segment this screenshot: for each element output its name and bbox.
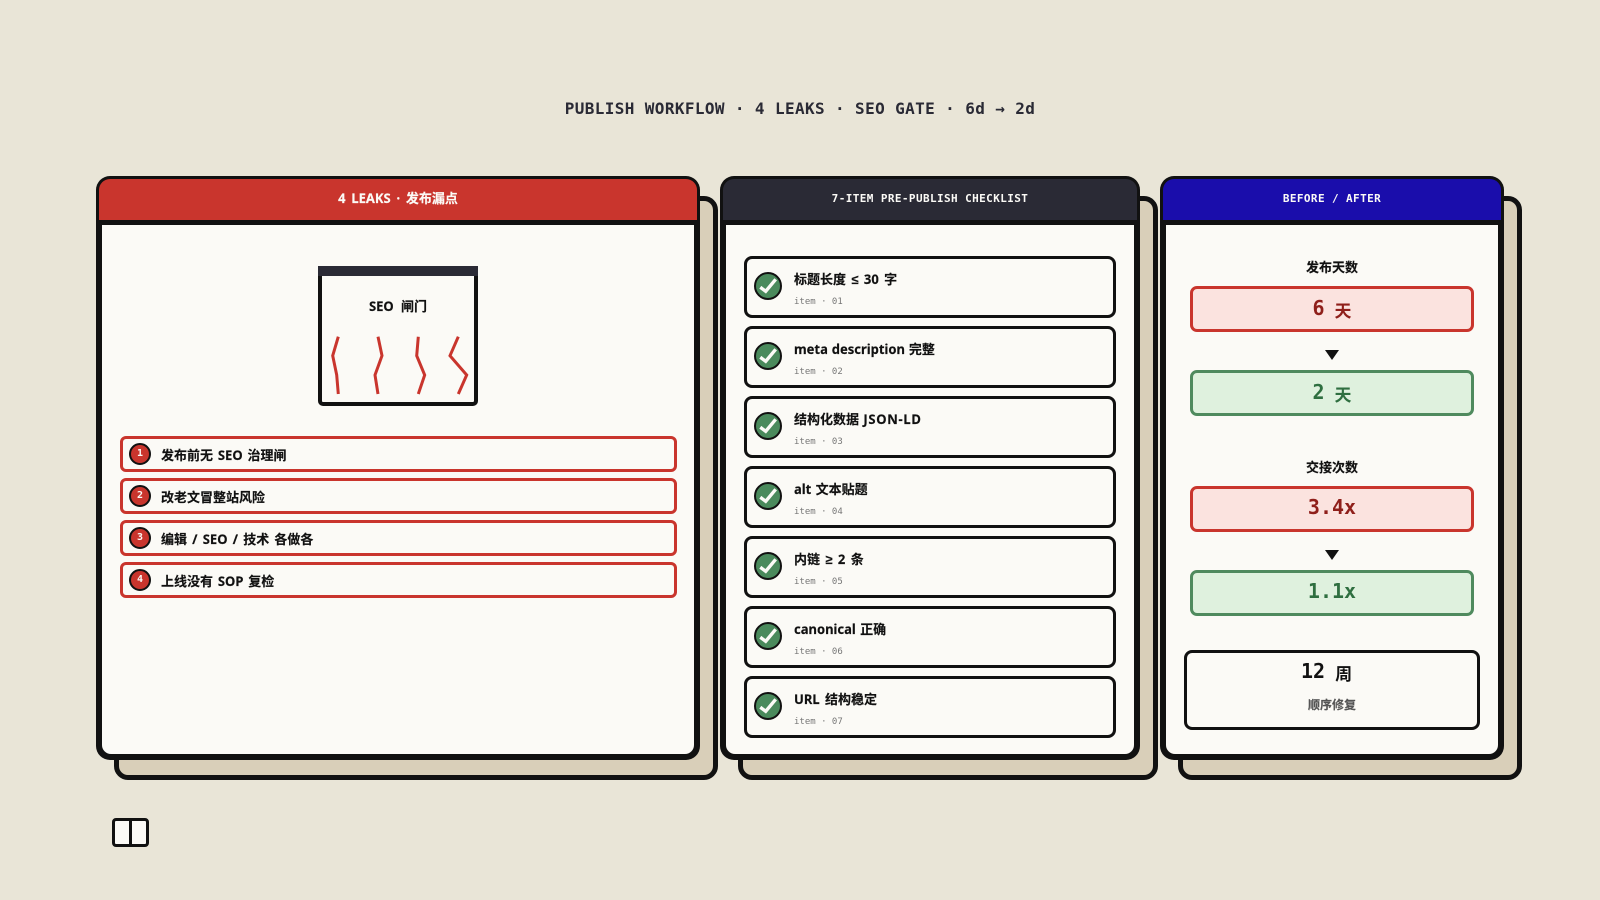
leak number 2: 2 [137, 490, 143, 501]
check item 7 [744, 676, 1116, 738]
arrow down [1325, 350, 1339, 360]
panel: 4 leaks [96, 176, 718, 780]
after value: 1.1x: 1.1x [1308, 579, 1356, 603]
before value: 3.4x: 3.4x [1308, 495, 1356, 519]
summary box: 12 weeks [1184, 650, 1480, 730]
check item 7: item · 07 [794, 717, 843, 727]
check item 5: 内链 ≥ 2 条 [794, 550, 864, 568]
check item 4: item · 04 [794, 507, 843, 517]
summary caption: 顺序修复 [1308, 696, 1356, 713]
panel: checklist [720, 176, 1158, 780]
leak number 3: 3 [137, 532, 143, 543]
after value: 1.1x [1190, 570, 1474, 616]
check item 6 [744, 606, 1116, 668]
after value: 2 days: 2 天 [1312, 380, 1352, 406]
leak text 4: 上线没有 SOP 复检 [161, 572, 274, 590]
leak number 3 [129, 527, 151, 549]
check item 2: item · 02 [794, 367, 843, 377]
panel heading: 4 leaks: 4 LEAKS · 发布漏点 [338, 189, 458, 207]
check item 5 [744, 536, 1116, 598]
panel heading: checklist: 7-ITEM PRE-PUBLISH CHECKLIST [832, 192, 1028, 205]
gate label: SEO 闸门 [369, 297, 427, 315]
arrow down [1325, 550, 1339, 560]
leak row 4 [120, 562, 677, 598]
check item 2 [744, 326, 1116, 388]
check item 6: item · 06 [794, 647, 843, 657]
panel heading: before / after [1163, 179, 1501, 220]
check item 5: item · 05 [794, 577, 843, 587]
icon: SEO gate with cracks [318, 266, 478, 406]
check item 1: 标题长度 ≤ 30 字 [794, 270, 897, 288]
panel heading: 4 leaks [99, 179, 697, 220]
before value: 6 days [1190, 286, 1474, 332]
title: PUBLISH WORKFLOW · 4 LEAKS · SEO GATE · 6d → 2d [565, 99, 1035, 118]
panel: before / after [1160, 176, 1522, 780]
metric label: handoffs: 交接次数 [1306, 458, 1358, 476]
before value: 6 days: 6 天 [1312, 296, 1352, 322]
icon: split panel logo [112, 818, 149, 847]
metric label: publish days: 发布天数 [1306, 258, 1358, 276]
summary value: 12 周 [1301, 659, 1352, 685]
panel heading: checklist [723, 179, 1137, 220]
leak number 4: 4 [137, 574, 143, 585]
panel heading: before / after: BEFORE / AFTER [1283, 192, 1381, 205]
leak number 2 [129, 485, 151, 507]
after value: 2 days [1190, 370, 1474, 416]
leak row 3 [120, 520, 677, 556]
leak text 2: 改老文冒整站风险 [161, 488, 265, 506]
leak number 4 [129, 569, 151, 591]
check item 1: item · 01 [794, 297, 843, 307]
leak text 3: 编辑 / SEO / 技术 各做各 [161, 530, 313, 548]
check item 4: alt 文本贴题 [794, 480, 868, 498]
leak number 1 [129, 443, 151, 465]
check item 3: 结构化数据 JSON-LD [794, 410, 922, 428]
leak row 2 [120, 478, 677, 514]
check item 2: meta description 完整 [794, 340, 935, 358]
leak number 1: 1 [137, 448, 143, 459]
check item 4 [744, 466, 1116, 528]
check item 3: item · 03 [794, 437, 843, 447]
before value: 3.4x [1190, 486, 1474, 532]
leak row 1 [120, 436, 677, 472]
cracks [331, 336, 468, 395]
check item 7: URL 结构稳定 [794, 690, 877, 708]
check item 6: canonical 正确 [794, 620, 886, 638]
check item 3 [744, 396, 1116, 458]
leak text 1: 发布前无 SEO 治理闸 [161, 446, 286, 464]
check item 1 [744, 256, 1116, 318]
